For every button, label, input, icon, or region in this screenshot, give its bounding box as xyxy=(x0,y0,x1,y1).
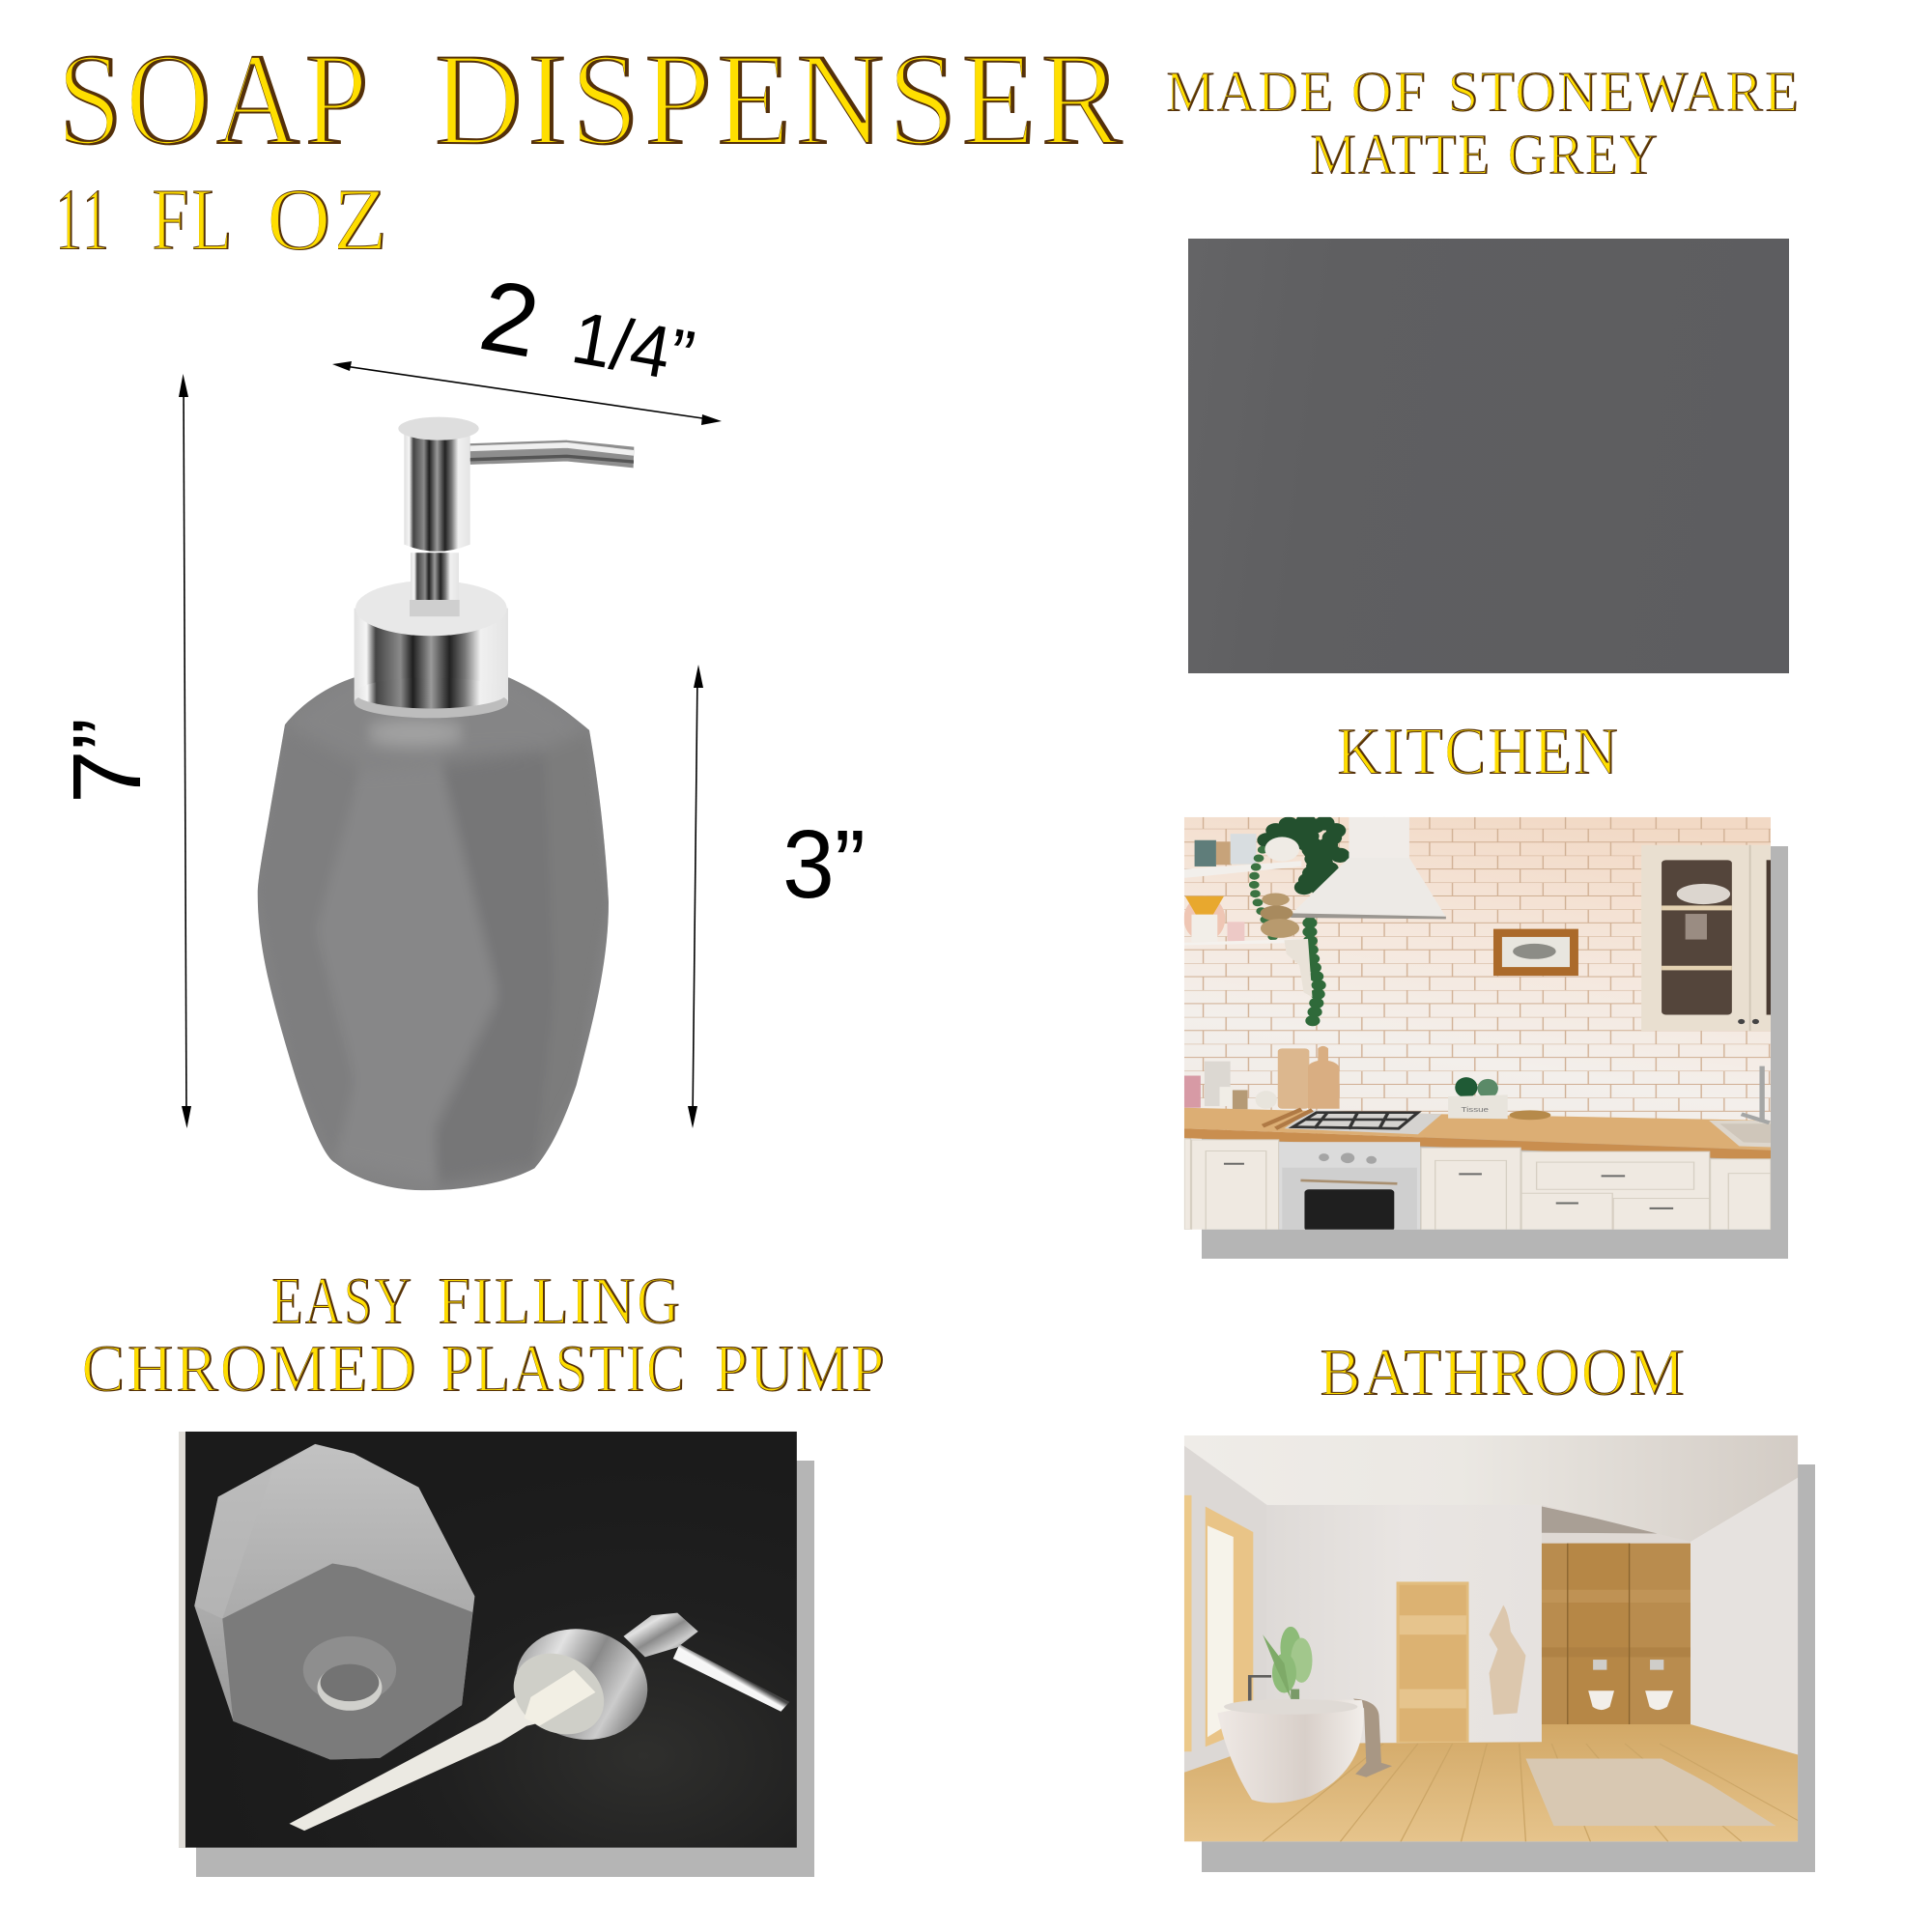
wood wall panels xyxy=(1542,1544,1690,1724)
capacity heading: OZ xyxy=(268,170,390,269)
cabinet handles xyxy=(1224,1164,1673,1208)
wall art frame xyxy=(1493,929,1578,976)
inverted bottle xyxy=(194,1444,474,1760)
body height arrow xyxy=(688,665,703,1128)
pump head xyxy=(398,417,479,552)
hanging plant xyxy=(1254,821,1343,1029)
kitchen heading: KITCHEN xyxy=(1337,715,1620,789)
floor xyxy=(1184,1724,1798,1841)
hanging robe xyxy=(1490,1605,1525,1715)
plant xyxy=(1263,1627,1312,1702)
pump heading: PLASTIC xyxy=(441,1332,687,1406)
range hood xyxy=(1291,817,1446,919)
pump heading: FILLING xyxy=(438,1264,682,1339)
room shell xyxy=(1184,1435,1798,1841)
panel: bathroom photo xyxy=(1184,1435,1798,1841)
width arrow xyxy=(332,361,722,425)
material heading: OF xyxy=(1351,60,1428,124)
material heading: STONEWARE xyxy=(1448,60,1801,124)
material heading: MATTE xyxy=(1310,123,1492,186)
body height label: 3” xyxy=(782,810,866,919)
soap dispenser product image xyxy=(251,417,634,1202)
panel: pump photo edge xyxy=(179,1432,186,1848)
title xyxy=(58,25,1126,173)
spice basket xyxy=(1510,1110,1550,1120)
gas stove xyxy=(1263,1109,1441,1134)
pump tube xyxy=(290,1697,535,1832)
door xyxy=(1397,1581,1469,1743)
sink and faucet xyxy=(1709,1066,1771,1147)
panel: matte grey swatch xyxy=(1188,239,1789,673)
bathtub xyxy=(1217,1699,1364,1803)
upper shelf and items xyxy=(1184,834,1301,878)
tissue box with plants xyxy=(1448,1077,1508,1119)
title: SOAP xyxy=(58,25,373,173)
panel: pump photo shadow xyxy=(196,1461,814,1877)
lower shelf and items xyxy=(1183,893,1312,997)
panel: pump and bottle photo xyxy=(185,1432,797,1848)
cutting boards xyxy=(1278,1046,1340,1109)
panel: kitchen photo shadow xyxy=(1202,846,1788,1259)
bathroom heading: BATHROOM xyxy=(1320,1336,1687,1410)
pump heading xyxy=(82,1264,887,1406)
pump stem xyxy=(410,553,460,616)
width label: 1/4” xyxy=(566,297,700,398)
pump heading: EASY xyxy=(271,1264,413,1339)
pump neck xyxy=(623,1613,698,1657)
rug xyxy=(1525,1759,1776,1826)
towel on tub xyxy=(1353,1699,1392,1777)
material heading: MADE xyxy=(1166,60,1335,124)
pump collar xyxy=(355,581,508,718)
width label xyxy=(472,259,700,398)
windows xyxy=(1184,1495,1253,1751)
bath faucet xyxy=(1250,1676,1271,1705)
width label: 2 xyxy=(472,259,547,380)
title: DISPENSER xyxy=(434,25,1126,173)
panel: kitchen photo xyxy=(1183,817,1772,1235)
jars and utensils xyxy=(1184,1062,1277,1109)
pump collar part xyxy=(514,1629,647,1740)
pump heading: PUMP xyxy=(715,1332,887,1406)
material heading: GREY xyxy=(1508,123,1660,186)
capacity heading xyxy=(55,170,390,269)
oven xyxy=(1279,1142,1420,1232)
pump heading: CHROMED xyxy=(82,1332,418,1406)
counter xyxy=(1184,1108,1771,1160)
height label: 7” xyxy=(53,718,161,804)
pump nozzle xyxy=(673,1644,789,1712)
base cabinets xyxy=(1184,1139,1772,1235)
capacity heading: FL xyxy=(152,170,235,269)
tissue box with plants: Tissue xyxy=(1462,1105,1489,1114)
material heading xyxy=(1166,60,1801,186)
wall toilets xyxy=(1588,1660,1673,1710)
wall cabinet xyxy=(1641,845,1771,1031)
height arrow xyxy=(179,374,191,1128)
pump spout xyxy=(470,445,634,462)
ceramic body xyxy=(251,664,615,1202)
panel: bathroom photo shadow xyxy=(1202,1464,1815,1872)
capacity heading: 11 xyxy=(55,170,111,269)
